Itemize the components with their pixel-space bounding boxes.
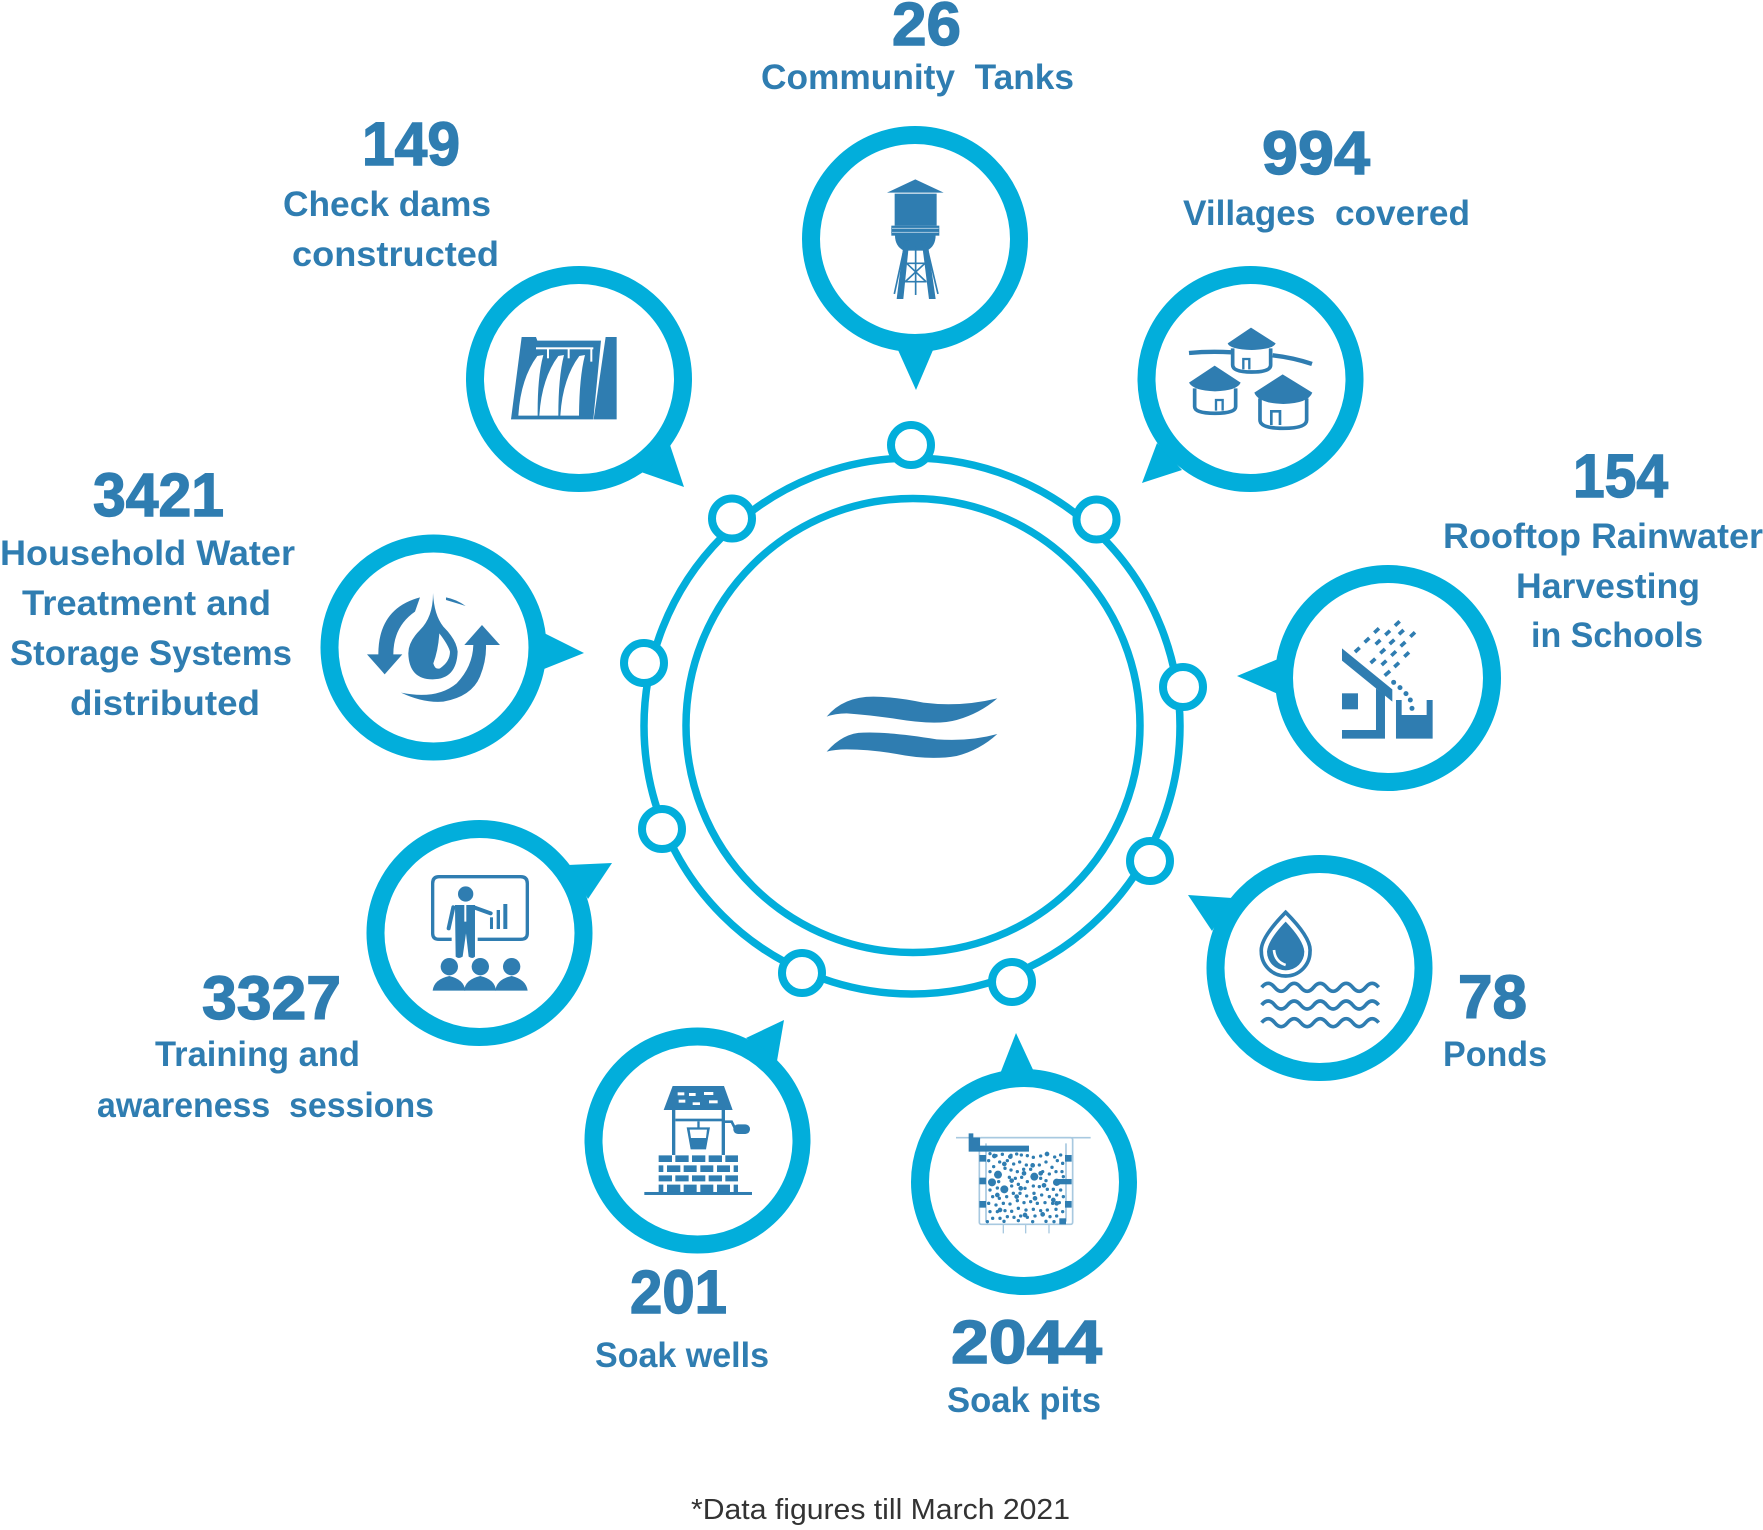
label: Check dams constructed [283,185,499,274]
icon: water drop over ripples [1261,912,1379,1027]
icon: check dam spillway [511,337,617,419]
footnote: *Data figures till March 2021 [691,1494,1070,1526]
label: Check dams constructed: constructed [292,235,499,274]
stat: rooftop rainwater harvesting [1237,442,1763,782]
label: Household Water Treatment and Storage Systems distributed: distributed [70,684,260,723]
callout bubble [376,829,612,1037]
label: Rooftop Rainwater Harvesting in Schools: Rooftop Rainwater [1443,517,1763,556]
outer ring [644,458,1180,994]
label: Household Water Treatment and Storage Systems distributed: Household Water [0,534,295,573]
stat: villages covered [1142,119,1470,483]
number: 3421: 3421 [93,461,224,529]
callout bubble [475,275,684,487]
callout bubble [330,544,584,752]
stat: ponds [1188,864,1547,1074]
icon: trainer presenting to audience [433,877,528,991]
label: Soak wells: Soak wells [595,1336,769,1375]
callout bubble [1188,864,1424,1072]
stat: training and awareness sessions [97,829,612,1125]
icon: water drop with cycle arrows [367,593,500,702]
stat: soak pits [920,1033,1128,1420]
stat: check dams [283,110,684,487]
callout bubble [811,135,1019,390]
label: Rooftop Rainwater Harvesting in Schools [1443,517,1763,655]
icon: brick well [644,1086,752,1195]
icon: village huts [1189,328,1312,428]
label: Training and awareness sessions: Training and [155,1035,360,1074]
number: 154: 154 [1573,442,1668,510]
label: Household Water Treatment and Storage Systems distributed: Treatment and [22,584,271,623]
number: 994: 994 [1262,119,1370,187]
callout bubble [1142,275,1354,483]
label: Rooftop Rainwater Harvesting in Schools: in Schools [1531,616,1703,655]
stat: soak wells [594,1020,802,1375]
number: 2044: 2044 [951,1308,1102,1376]
icon: rooftop rainwater harvesting [1342,621,1433,739]
stat: household water treatment [0,461,584,752]
label: Rooftop Rainwater Harvesting in Schools: Harvesting [1516,567,1700,606]
ring nodes [624,425,1203,1002]
label: Training and awareness sessions: awareness sessions [97,1086,434,1125]
callout bubble [1237,574,1492,782]
number: 3327: 3327 [202,964,341,1032]
icon: water tower [887,179,944,299]
label: Villages covered: Villages covered [1183,194,1470,233]
callout bubble [594,1020,802,1244]
icon: central water waves [827,697,997,758]
label: Check dams constructed: Check dams [283,185,491,224]
number: 201: 201 [630,1258,727,1326]
callout bubble [920,1033,1128,1286]
central ring diagram [624,425,1203,1002]
label: Training and awareness sessions [97,1035,434,1125]
label: Soak pits: Soak pits [947,1381,1101,1420]
stat: community tanks [761,0,1074,390]
label: Household Water Treatment and Storage Systems distributed: Storage Systems [10,634,292,673]
label: Community Tanks: Community Tanks [761,58,1074,97]
inner ring [686,498,1140,952]
label: Household Water Treatment and Storage Systems distributed [0,534,295,723]
label: Ponds: Ponds [1443,1035,1547,1074]
number: 149: 149 [362,110,460,178]
number: 78: 78 [1458,963,1527,1031]
icon: soak pit cross-section [956,1133,1091,1233]
